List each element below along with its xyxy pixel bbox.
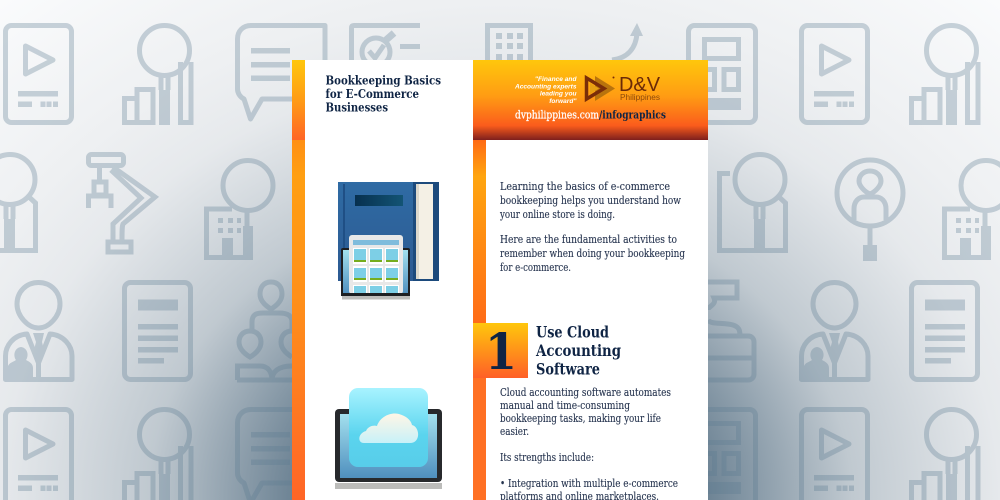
inner colour strip <box>473 140 486 500</box>
title: Businesses <box>326 100 388 114</box>
icon: ledger book with tablet <box>338 182 439 300</box>
tagline: "Finance and <box>535 76 577 83</box>
infographic card <box>292 60 708 500</box>
step number 1 <box>473 322 528 381</box>
step heading: Software <box>536 360 600 378</box>
tagline: Accounting experts <box>514 83 577 90</box>
tagline <box>514 76 577 105</box>
step body text: bookkeeping tasks, making your life <box>500 412 661 425</box>
step heading: Accounting <box>535 341 621 360</box>
step body text: Cloud accounting software automates <box>500 386 671 399</box>
title: Bookkeeping Basics <box>326 72 441 88</box>
website link <box>515 108 666 122</box>
step body text: Its strengths include: <box>500 451 594 464</box>
title <box>326 72 441 114</box>
header banner <box>473 60 708 140</box>
left colour strip <box>292 60 305 500</box>
tagline: leading you <box>540 90 576 98</box>
intro text: bookkeeping helps you understand how <box>500 194 681 207</box>
step heading: Use Cloud <box>536 322 609 342</box>
step number 1: 1 <box>485 322 517 381</box>
logo: D&V Philippines: D&V <box>619 74 661 96</box>
step body text <box>500 386 678 500</box>
intro text: remember when doing your bookkeeping <box>500 247 685 260</box>
logo: D&V Philippines <box>586 74 661 102</box>
logo: D&V Philippines: Philippines <box>620 93 660 102</box>
title: for E-Commerce <box>326 86 419 101</box>
intro text: for e-commerce. <box>500 261 571 274</box>
step body text: manual and time-consuming <box>500 399 630 412</box>
step heading <box>535 322 621 378</box>
intro text: Learning the basics of e-commerce <box>500 180 670 193</box>
step body text: easier. <box>500 425 529 438</box>
tagline: forward" <box>549 98 577 105</box>
icon: cloud on laptop <box>335 388 442 489</box>
website link: dvphilippines.com <box>515 108 599 122</box>
intro text <box>499 180 685 274</box>
intro text: Here are the fundamental activities to <box>500 233 677 246</box>
intro text: your online store is doing. <box>499 208 615 221</box>
website link: /infographics <box>599 108 666 122</box>
step body text: • Integration with multiple e-commerce <box>500 477 678 490</box>
